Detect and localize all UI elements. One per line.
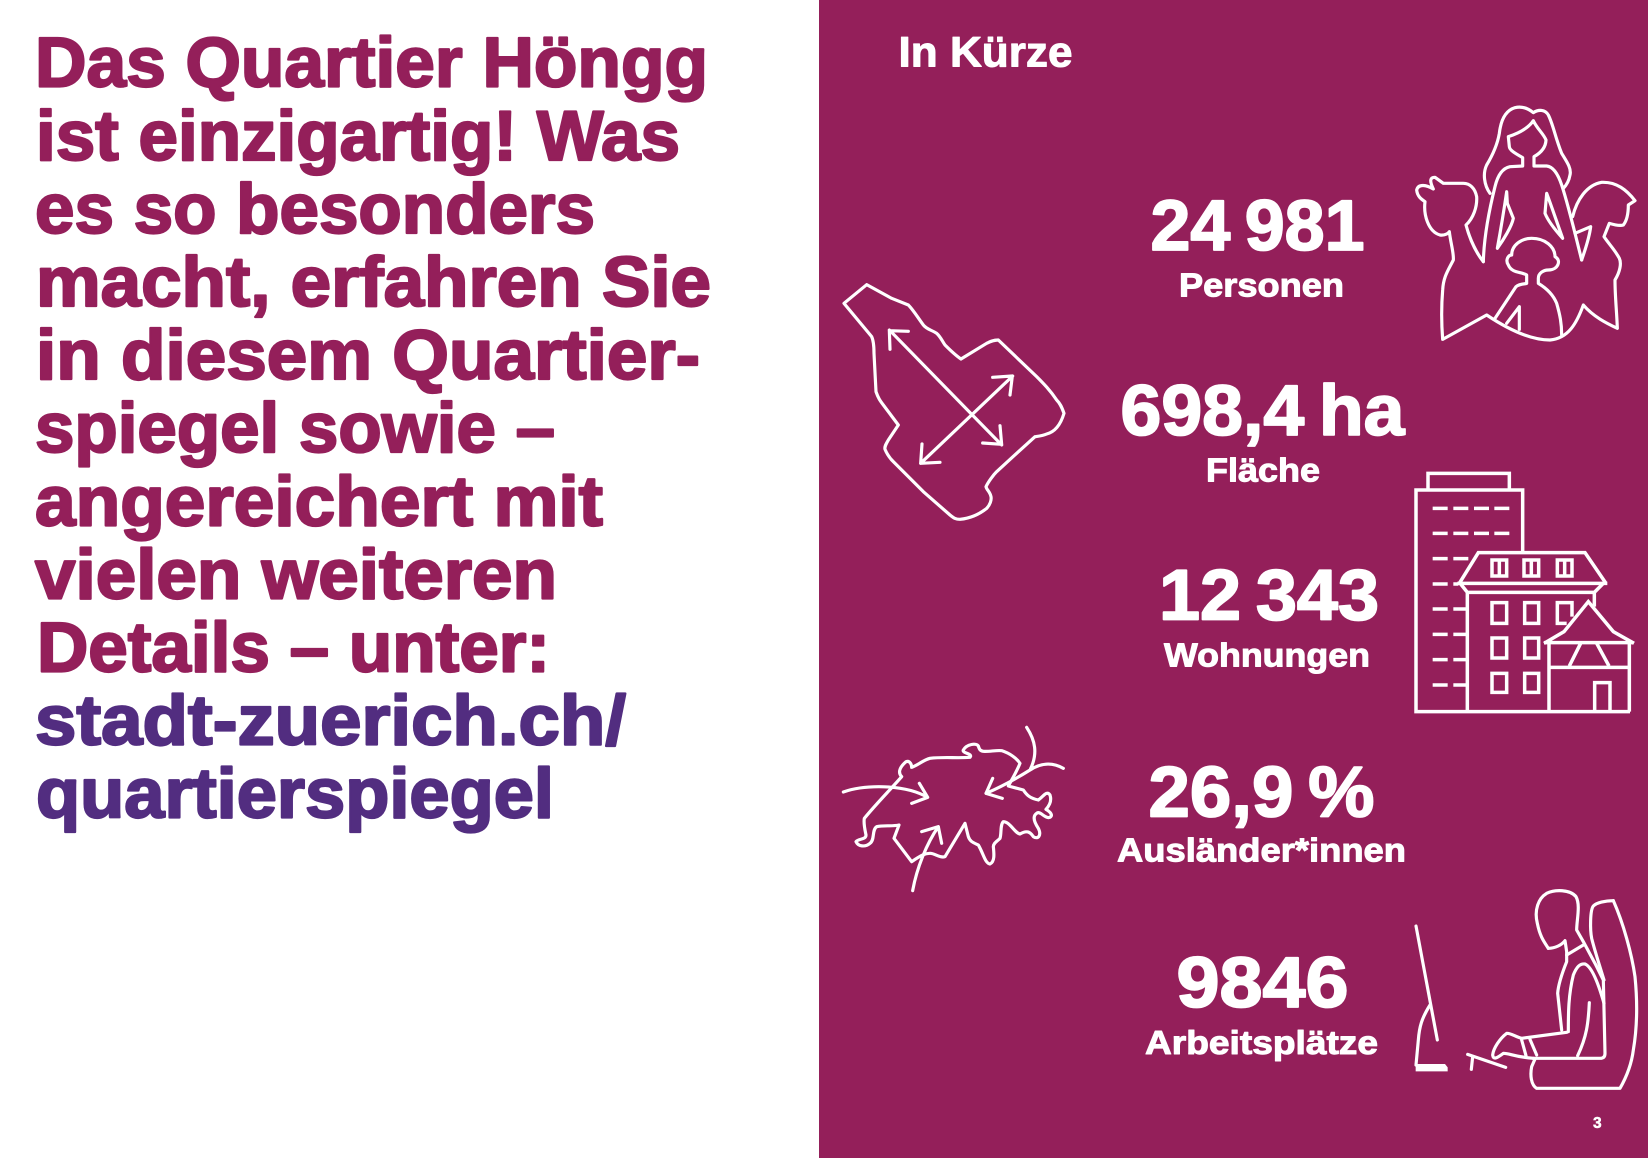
stat: foreign residents: [1117, 754, 1406, 869]
heading: In Kürze: In Kürze: [898, 29, 1072, 77]
icon: group of people: [1417, 107, 1635, 340]
icon: person at computer: [1416, 891, 1637, 1088]
stat: foreign residents: Ausländer*innen: [1117, 832, 1406, 869]
heading: intro statement: angereichert mit: [35, 461, 603, 540]
stat: area: [1120, 372, 1405, 489]
heading: intro statement: [35, 23, 711, 686]
heading: intro statement: spiegel sowie –: [35, 388, 555, 467]
heading: intro statement: vielen weiteren: [35, 534, 557, 613]
stat: workplaces: 9846: [1176, 944, 1348, 1023]
stat: residents: [1150, 187, 1364, 304]
icon: buildings: [1416, 473, 1634, 712]
heading: intro statement: es so besonders: [35, 169, 595, 248]
page number: 3: [1593, 1115, 1602, 1132]
stat: dwellings: [1159, 556, 1379, 674]
stat: workplaces: [1145, 944, 1378, 1061]
link: quartierspiegel URL: stadt-zuerich.ch/: [35, 681, 626, 760]
icon: map of Switzerland with arrows: [843, 727, 1063, 891]
stat: dwellings: 12 343: [1159, 556, 1379, 635]
stat: dwellings: Wohnungen: [1164, 637, 1370, 674]
stat: residents: 24 981: [1150, 187, 1364, 266]
heading: intro statement: in diesem Quartier-: [36, 315, 700, 394]
stat: area: 698,4 ha: [1120, 372, 1405, 451]
panel: white left page: [0, 0, 819, 1158]
link: quartierspiegel URL: [35, 681, 626, 833]
stat: area: Fläche: [1206, 452, 1320, 489]
stat: workplaces: Arbeitsplätze: [1145, 1024, 1378, 1061]
heading: intro statement: Details – unter:: [37, 608, 550, 686]
stat: foreign residents: 26,9 %: [1148, 754, 1374, 833]
panel: magenta facts page: [819, 0, 1648, 1158]
heading: intro statement: Das Quartier Höngg: [35, 23, 708, 102]
stat: residents: Personen: [1179, 267, 1344, 304]
icon: district outline with area arrows: [844, 285, 1064, 519]
link: quartierspiegel URL: quartierspiegel: [36, 754, 554, 833]
heading: intro statement: ist einzigartig! Was: [36, 96, 680, 175]
heading: intro statement: macht, erfahren Sie: [36, 242, 711, 321]
